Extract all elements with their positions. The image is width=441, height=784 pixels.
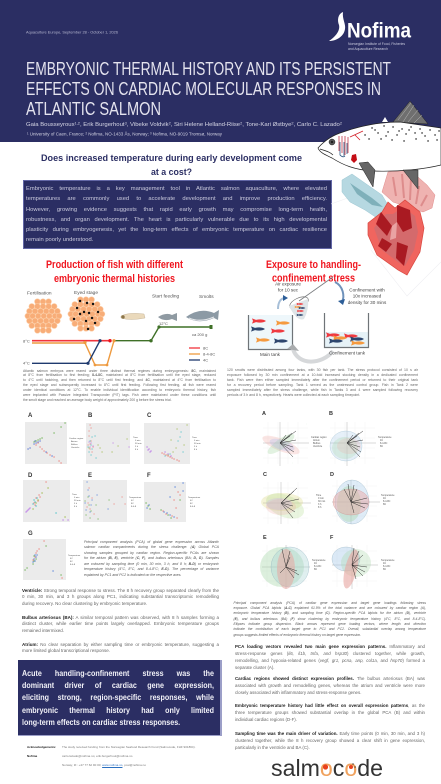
legend B <box>133 437 142 451</box>
result: sampling time: particularly in the ventricle and BA (C). <box>235 744 310 750</box>
heading: question: Does increased temperature during early development come <box>41 153 302 164</box>
legend D: 0 min <box>74 497 80 499</box>
stage labels: Eyed stage <box>74 290 98 296</box>
thermal regimes description: were implanted with Passive Integrated Transponder (PIT) tags. Fish were maintained under these conditions until <box>23 393 216 397</box>
logo: Nofima <box>329 12 411 51</box>
PCA caption right: Principal component analysis (PCA) of cardiac gene expression and target gene loadings following stress <box>234 600 426 604</box>
intro text: remain poorly understood. <box>26 237 93 243</box>
legend A: Bulbus <box>71 444 79 446</box>
legend biplot D: 4C <box>383 497 386 500</box>
4C line <box>32 341 100 363</box>
PCA caption right: (E), and bulbus arteriosus (BA) (F) show clustering by embryonic temperature history (4°C, 8°C, and 8-4-8°C). <box>234 617 426 621</box>
biplot D <box>332 480 380 524</box>
heading: stress exposure: Exposure to handling- <box>266 259 361 271</box>
conclusion text: dominant driver of cardiac gene expression, <box>22 680 214 690</box>
result: cardiac regions: Cardiac regions showed distinct expression profiles. The bulbus arteriosus (BA) was <box>235 676 425 680</box>
intro text: temperatures are commonly used to accelerate development and improve production efficiency. <box>26 196 327 202</box>
legend A: Cardiac region <box>69 437 84 440</box>
legend G: 8-4-8 <box>70 564 76 566</box>
legend biplot C: 8 h <box>318 506 322 509</box>
legend biplot D <box>381 494 395 506</box>
biplot F <box>332 545 378 590</box>
legend F <box>188 496 201 508</box>
acknowledgements <box>27 745 196 768</box>
thermal regimes description: under identical conditions at 12°C. To enable individual identification according to embryonic thermal history, fish <box>23 388 216 392</box>
finding: ventricle: during recovery. No clear clustering by embryonic temperature. <box>22 601 147 606</box>
legend biplot E: 4C <box>314 562 317 565</box>
legend B: 0 min <box>135 440 141 442</box>
legend biplot A: Atrium <box>313 439 320 442</box>
result: cardiac regions: closely associated with inflammatory and stress-response genes. <box>235 690 361 694</box>
panel labels: D <box>28 473 33 479</box>
arrow: recovery return <box>293 349 333 362</box>
conclusion text: long-term effects on cardiac stress responses. <box>22 717 180 727</box>
PCA panel D <box>23 480 70 522</box>
authors: , Siri Helene Helland-Riise <box>171 122 240 128</box>
heading: production <box>46 259 183 285</box>
stage labels: Fertilisation <box>27 290 52 296</box>
panel labels <box>28 413 152 537</box>
12C feeding line <box>114 327 211 341</box>
PCA panel C <box>144 423 190 464</box>
legend biplot F: Temperature <box>381 559 395 562</box>
legend D: 30 min <box>74 500 81 502</box>
authors: , Carlo C. Lazado <box>294 122 340 128</box>
PCA panel G <box>23 539 66 580</box>
PCA caption left: Principal component analysis (PCA) of global gene expression across Atlantic <box>84 540 219 544</box>
fertilised eggs <box>25 299 62 333</box>
stress protocol description: exposure followed by 30 min confinement at a 10-fold increased stocking density in a dedicated confinement <box>227 372 418 376</box>
heading: stress exposure <box>266 259 361 284</box>
fish body <box>318 122 441 171</box>
legend B: 3 h <box>135 446 139 448</box>
panel labels: F <box>147 473 151 479</box>
legend F: 4C <box>190 500 193 502</box>
result: loading vectors: separate cluster (A). <box>235 665 275 670</box>
pectoral fin <box>359 162 375 187</box>
protocol labels: 10x increased <box>353 294 382 298</box>
logo subtitle <box>348 42 405 51</box>
authors: 1,2 <box>75 121 80 125</box>
result: cardiac regions: associated with growth and remodelling genes, whereas the atrium and ventricle were more <box>235 682 425 688</box>
finding: ventricle: 0 min, 30 min, and 3 h groups along PC1, indicating substantial transcriptomic remodelling <box>22 594 219 599</box>
heading: question: at a cost? <box>151 167 192 178</box>
atrium <box>382 170 435 212</box>
header band <box>0 0 441 142</box>
legend biplot C: 3 h <box>318 503 322 506</box>
legend G: 8C <box>70 561 73 563</box>
temperature labels: 12°C <box>159 321 168 326</box>
legend E: 4C <box>131 500 134 502</box>
authors: , Tone-Kari Østbye <box>242 122 291 128</box>
biplot E <box>260 545 310 589</box>
finding: atrium: Atrium: No clear separation by either sampling time or embryonic temperature, suggesting a <box>22 642 219 646</box>
legend biplot C <box>316 494 326 509</box>
legend biplot B <box>378 436 392 448</box>
legend B: Time <box>133 437 139 439</box>
protocol labels: Confinement tank <box>329 350 366 356</box>
authors: 2 <box>169 121 171 125</box>
conclusion text: Acute handling-confinement stress was the <box>22 668 214 678</box>
PCA caption right: Ellipses indicate group dispersion. Black arrows represent gene loading vectors, where length and direction <box>234 622 426 626</box>
PCA caption right: exposure. Global PCA biplots (A-C) explained 61.5% of the total variance and are coloured by cardiac region (A), <box>234 606 426 610</box>
net <box>288 277 333 319</box>
PCA panel E <box>83 480 127 522</box>
temperature labels: ca 200 g <box>192 332 207 337</box>
panel labels: B <box>88 413 93 419</box>
logo subtitle: Norwegian Institute of Food, Fisheries <box>348 42 405 46</box>
PCA caption right <box>234 600 426 637</box>
legend F: 8C <box>190 503 193 505</box>
legend biplot F: 8C <box>383 568 386 571</box>
legend: 8C <box>203 346 208 350</box>
intro text: However, growing evidence suggests that rapid early growth may compromise long-term health, <box>26 207 327 213</box>
larva <box>121 313 145 320</box>
PCA caption left: are coloured by sampling time (0 min, 30 min, 3 h, and 8 h; B-D) or embryonic <box>84 562 219 566</box>
protocol labels: Main tank <box>260 352 281 357</box>
stress protocol description: periods of 3 h and 8 h, respectively. Hearts were collected at each sampling timepoint. <box>227 392 360 396</box>
biplot labels: B <box>329 411 333 417</box>
result: embryonic temperature: three temperature groups showed substantial overlap in the global PCA (B) and within <box>235 710 425 715</box>
legend C: 0 min <box>194 440 200 442</box>
PCA panel A <box>25 422 67 464</box>
PCA caption left: salmon cardiac compartments during the stress challenge. (A) Global PCA <box>84 545 219 549</box>
ventral fin <box>403 170 418 189</box>
icon: Nofima swoosh <box>329 12 345 41</box>
salmon illustration <box>318 101 441 189</box>
legend: 4C <box>203 358 208 362</box>
finding: atrium <box>22 642 219 653</box>
intro text: Embryonic temperature is a key management tool in Atlantic salmon aquaculture, where elevated <box>26 186 327 192</box>
thermal regimes description: to 4°C until hatching, and then returned to 8°C until first feeding; and 4C, maintained at 4°C from fertilisation to <box>23 378 216 382</box>
acknowledgements: Acknowledgements: <box>27 745 56 749</box>
biplot C <box>261 482 311 524</box>
thermal regimes description: the eyed stage and subsequently increased to 8°C until first feeding. Following first feeding, all fish were reared <box>23 383 216 387</box>
arrow: into net <box>278 298 285 309</box>
panel labels: A <box>28 413 33 419</box>
8-4-8C line <box>32 341 114 365</box>
authors: 2 <box>340 121 342 125</box>
legend G <box>68 554 81 566</box>
authors: , Erik Burgerhout <box>80 122 125 128</box>
acknowledgements: Norway; tlf.: +47 77 62 90 00; www.nofima.no, post@nofima.no <box>62 762 146 766</box>
legend A: Atrium <box>71 440 77 443</box>
8C line <box>32 340 110 342</box>
finding: ventricle: Ventricle: Strong temporal response to stress. The 8 h recovery group separated clearly from the <box>22 588 219 592</box>
heading: production: Production of fish with different <box>46 259 183 271</box>
stress protocol description: sampled immediately after the stress challenge, while fish in Tanks 3 and 4 were sampled following recovery <box>227 388 418 392</box>
thermal regimes description: Atlantic salmon embryos were reared under three distinct thermal regimes during embryogenesis: 8C, maintained <box>23 368 216 372</box>
legend E: Temperature <box>129 496 142 499</box>
confinement tank <box>324 313 368 348</box>
finding: atrium: more limited global transcriptional response. <box>22 648 110 653</box>
result: cardiac regions <box>235 676 425 695</box>
ventricle <box>368 200 424 275</box>
protocol labels <box>260 282 387 357</box>
legend E: 8-4-8 <box>131 506 137 508</box>
stress protocol description: tank. Fish were then either sampled immediately after the confinement period or returned to their original tank <box>227 378 418 382</box>
legend B: 8 h <box>135 449 139 451</box>
result: embryonic temperature: individual cardiac regions (D-F). <box>235 717 297 722</box>
legend biplot A: Bulbus <box>313 442 321 445</box>
stress protocol description: for a recovery period before sampling. Tank 1 served as the unstressed control group. Fish in Tank 2 were <box>227 382 418 386</box>
conclusion text: embryonic thermal history had only limited <box>22 705 214 715</box>
heading: stress exposure: confinement stress <box>272 272 355 284</box>
heading: production: embryonic thermal histories <box>54 273 175 285</box>
stage labels: Start feeding <box>152 294 180 300</box>
PCA biplots <box>260 411 395 590</box>
authors: 2 <box>291 121 294 125</box>
conclusion text <box>22 668 214 727</box>
legend D: Time <box>72 494 78 496</box>
biplot labels: F <box>330 535 334 541</box>
acknowledgements: Nofima <box>27 754 37 758</box>
authors: Gaia Bousseyroux <box>26 122 71 128</box>
PCA plots: global gene expression <box>23 413 201 580</box>
legend biplot F: 4C <box>383 562 386 565</box>
PCA caption left: for the atrium (B, E), ventricle (C, F), and bulbus arteriosus (BA; D, G). Samples <box>84 556 219 560</box>
legend biplot D: 8-4-8C <box>383 500 391 503</box>
legend biplot E: 8C <box>314 568 317 571</box>
intro text: plasticity during embryogenesis, yet the long-term effects of embryonic temperature on cardiac resilience <box>26 227 327 233</box>
finding: bulbus arteriosus: Bulbus arteriosus (BA): A similar temporal pattern was observed, with 8 h samples forming a <box>22 614 219 620</box>
legend C: 30 min <box>194 443 201 445</box>
legend D: 8 h <box>74 506 78 508</box>
heart illustration <box>331 170 441 296</box>
acknowledgements: carlo.lazado@nofima.no; erik.burgerhout@nofima.no <box>62 754 132 758</box>
legend C <box>192 437 201 451</box>
acknowledgements: The study received funding from the Norwegian Seafood Research Fund (Salmocode, FHF 901864). <box>62 745 195 749</box>
intro text <box>26 186 327 243</box>
PCA caption left: showing samples grouped by cardiac region. Region-specific PCAs are shown <box>84 551 219 555</box>
thermal regimes description: the smolt stage and reached an average body weight of approximately 200 g before the stress trial. <box>23 398 172 402</box>
legend biplot F <box>381 559 395 571</box>
biplot labels: A <box>262 411 266 417</box>
conclusion panel <box>18 660 222 736</box>
thermal regimes description: at 8°C from fertilisation to first feeding; 8-4-8C, maintained at 8°C from fertilisation until the eyed stage, reduced <box>23 373 216 377</box>
legend E: 8C <box>131 503 134 505</box>
temperature labels: 4°C <box>23 360 30 366</box>
intro text: robustness, and organ development. The heart is particularly vulnerable due to its high developmental <box>26 217 327 223</box>
legend A <box>69 437 84 449</box>
legend biplot C: 0 min <box>318 497 325 500</box>
PCA caption right: embryonic temperature history (B), and sampling time (C). Region-specific PCA biplots for the atrium (D), ventricle <box>234 611 426 615</box>
PCA caption left <box>84 540 219 577</box>
thermal regimes description <box>23 368 216 402</box>
legend G: Temperature <box>68 554 81 557</box>
PCA caption right: groups suggests limited effects of embryonic thermal history on target gene expression. <box>234 633 361 637</box>
finding: ventricle <box>22 588 219 606</box>
title <box>26 59 391 119</box>
parr <box>158 313 177 321</box>
biplot labels: D <box>330 472 334 478</box>
legend D <box>72 494 81 508</box>
PCA caption left: temperature history (4°C, 8°C, and 8-4-8°C; E-G). The percentage of variance <box>84 567 219 571</box>
legend F: 8-4-8 <box>190 506 196 508</box>
legend biplot E <box>312 559 326 571</box>
legend F: Temperature <box>188 496 201 499</box>
stress protocol diagram <box>248 277 387 362</box>
legend biplot F: 8-4-8C <box>383 565 391 568</box>
protocol labels: for 10 sec <box>278 288 299 292</box>
PCA panel F <box>144 482 186 522</box>
result: loading vectors <box>235 644 425 670</box>
finding: bulbus arteriosus: distinct cluster, while earlier time points largely overlapped. Embryonic temperature groups <box>22 621 219 626</box>
legend C: 8 h <box>194 449 198 451</box>
authors: 3 <box>125 121 127 125</box>
legend biplot E: Temperature <box>312 559 326 562</box>
legend <box>189 346 215 362</box>
stage labels: Smolts <box>199 294 214 300</box>
stress protocol description <box>227 368 418 397</box>
stress protocol description: 120 smolts were distributed among four tanks, with 30 fish per tank. The stress protocol consisted of 10 s air <box>227 368 418 372</box>
authors: , Vibeke Voldvik <box>127 122 169 128</box>
affiliations: ¹ University of Caen, France; ² Nofima, NO-1433 Ås, Norway; ³ Nofima, NO-9019 Tromsø, Norway <box>27 132 223 136</box>
result: loading vectors: stress-response genes (il6, il1b, tnfa, and hsp30) clustered together, while growth, <box>235 651 425 656</box>
legend B: 30 min <box>135 443 142 445</box>
legend biplot A: Ventricle <box>313 445 323 448</box>
arrow: into confinement <box>335 282 343 302</box>
legend biplot B: Temperature <box>378 436 392 439</box>
legend: 8-4-8C <box>203 352 215 356</box>
result: embryonic temperature: Embryonic temperature history had little effect on overall expression patterns, as the <box>235 703 425 708</box>
protocol labels: density for 30 mins <box>348 300 387 305</box>
result: sampling time: clustered together, while the 8 h recovery group showed a clear shift in gene expression, <box>235 738 425 742</box>
stage labels <box>27 290 214 300</box>
PCA panel B <box>86 423 130 464</box>
result: loading vectors: remodelling, and hypoxia-related genes (vegf, gr1, pcna, anp, col1a, and hsp70) formed a <box>235 658 425 663</box>
timeline diagram <box>23 290 219 366</box>
legend biplot D: Temperature <box>381 494 395 497</box>
legend biplot A: Cardiac region <box>311 436 327 439</box>
fish heart <box>351 154 357 163</box>
temperature labels <box>23 321 207 366</box>
temperature labels: 8°C <box>23 338 30 344</box>
logo subtitle: and Aquaculture Research <box>348 47 388 51</box>
legend biplot D: 8C <box>383 503 386 506</box>
panel labels: C <box>147 413 152 419</box>
legend biplot C: 30 min <box>318 500 326 503</box>
conference line: Aquaculture Europe, September 28 - October 1, 2026 <box>26 30 118 34</box>
legend D: 3 h <box>74 503 78 505</box>
result: loading vectors: PCA loading vectors revealed two main gene expression patterns. Inflammatory and <box>235 644 425 648</box>
result: sampling time: Sampling time was the main driver of variation. Early time points (0 min, 30 min, and 3 h) <box>235 730 425 736</box>
PCA caption left: explained by PC1 and PC2 is indicated on the respective axes. <box>84 573 181 577</box>
biplot labels: C <box>263 472 267 478</box>
heading: question <box>41 153 302 178</box>
legend E <box>129 496 142 508</box>
PCA caption right: indicate the contribution of each target gene to PC1 and PC2. Overall, substantial overlap among temperature <box>234 627 426 631</box>
legend C: Time <box>192 437 198 439</box>
legend biplot B: 8C <box>380 445 383 448</box>
biplot labels <box>262 411 334 541</box>
bulbus arteriosus <box>342 174 388 220</box>
protocol labels: Confinement with <box>349 288 385 292</box>
legend biplot B: 4C <box>380 439 383 442</box>
fish eye <box>329 139 335 145</box>
logo wordmark: Nofima <box>347 20 411 42</box>
eyed eggs <box>68 297 105 331</box>
intro panel <box>23 180 332 249</box>
fish spots <box>365 126 439 141</box>
biplot A <box>260 422 309 466</box>
result: sampling time <box>235 730 425 750</box>
biplot B <box>330 422 376 466</box>
legend C: 3 h <box>194 446 198 448</box>
legend A: Ventricle <box>71 446 80 449</box>
panel labels: E <box>88 473 92 479</box>
dorsal fin <box>393 101 428 124</box>
finding: bulbus arteriosus <box>22 614 219 633</box>
timeline markers <box>83 325 213 366</box>
logo: salmocode: salmocode <box>271 755 383 781</box>
conclusion text: eliciting strong, region-specific responses, while <box>22 692 214 702</box>
legend biplot B: 8-4-8C <box>380 442 388 445</box>
result: embryonic temperature <box>235 703 425 722</box>
legend biplot E: 8-4-8C <box>314 565 322 568</box>
smolt <box>186 310 219 321</box>
panel labels: G <box>28 531 33 537</box>
legend biplot A <box>311 436 327 448</box>
biplot labels: E <box>263 535 267 541</box>
title: ATLANTIC SALMON <box>26 99 161 119</box>
authors: 2 <box>240 121 242 125</box>
legend biplot C: Time <box>316 494 322 497</box>
legend G: 4C <box>70 558 73 560</box>
finding: bulbus arteriosus: remained intermixed. <box>22 628 64 633</box>
fish gills <box>339 136 348 155</box>
main tank <box>248 315 292 350</box>
protocol labels: Air exposure <box>275 282 301 286</box>
